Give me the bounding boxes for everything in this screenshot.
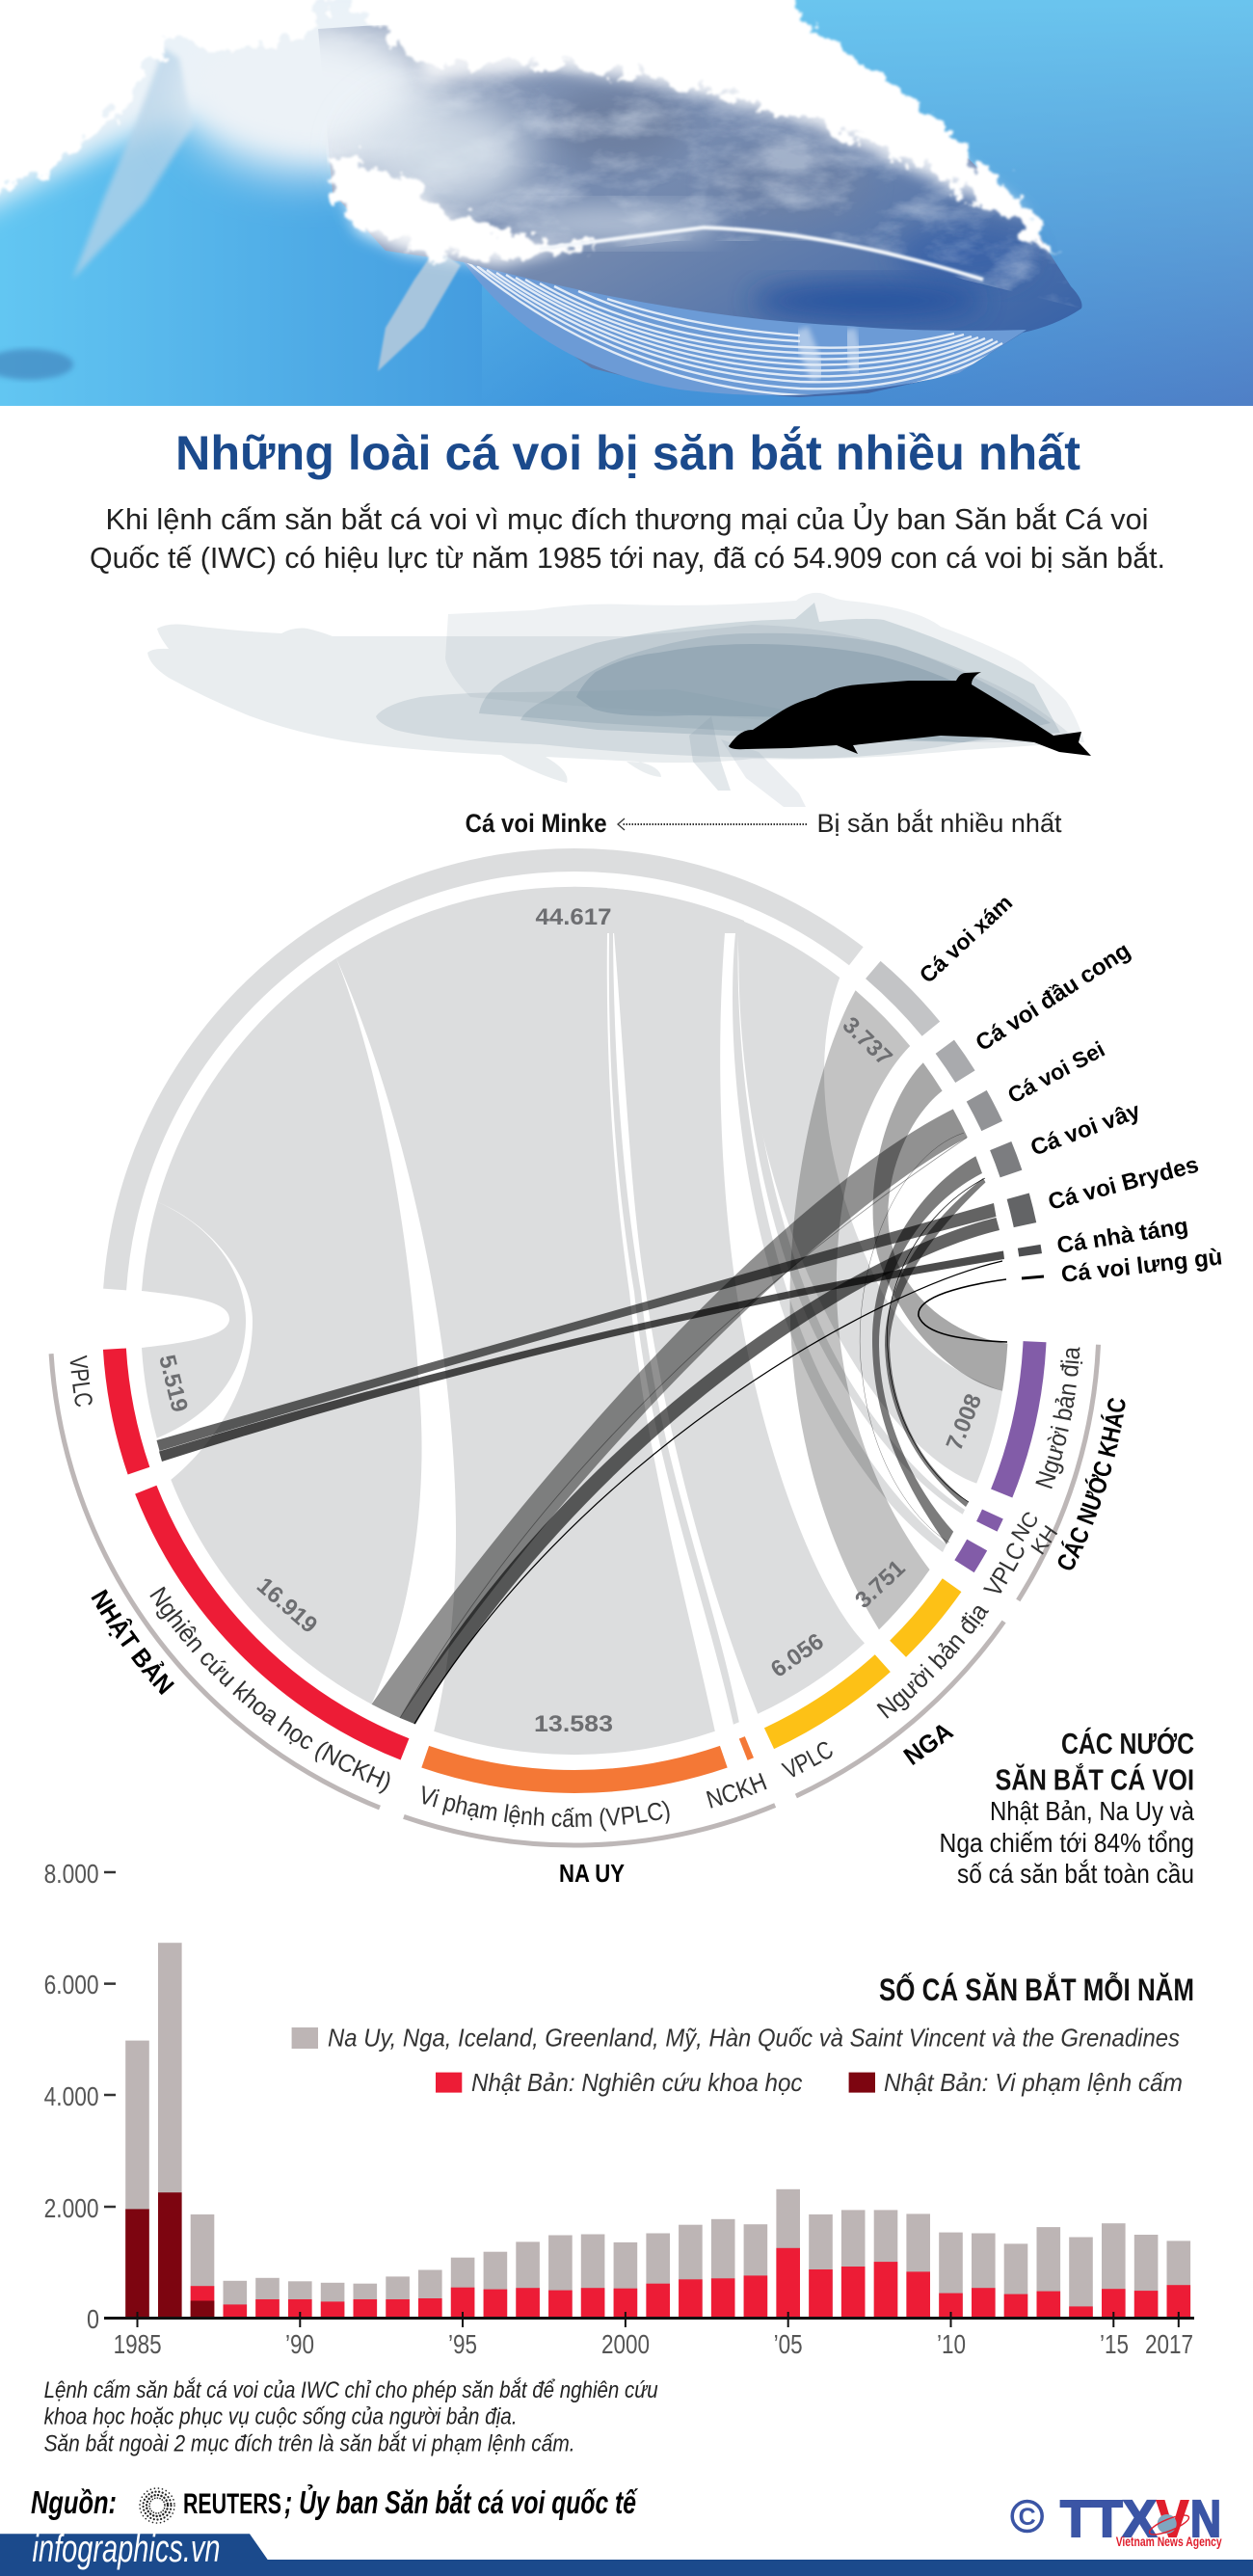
species labels: Cá voi Brydes <box>1046 1152 1201 1216</box>
country labels: NHẬT BẢN <box>91 1589 174 1695</box>
footer band: infographics.vn <box>33 2528 220 2570</box>
y axis: 4.000 <box>44 2081 99 2111</box>
species labels: Cá nhà táng <box>1055 1213 1190 1259</box>
summary text block: Nga chiếm tới 84% tổng <box>939 1828 1194 1858</box>
x axis: ’15 <box>1100 2329 1129 2359</box>
chord values: 7.008 <box>942 1390 987 1454</box>
species labels: Cá voi lưng gù <box>1060 1244 1224 1288</box>
chord values: 44.617 <box>536 904 611 930</box>
chord diagram: Minke ribbons <box>142 887 1002 1755</box>
source line <box>31 2484 639 2523</box>
ring: hunting countries arcs <box>115 1342 1034 1782</box>
bar chart: whales caught per year <box>125 1943 1190 2318</box>
purpose labels on ring: Vi phạm lệnh cấm (VPLC) <box>422 1785 670 1832</box>
purpose labels on ring: Người bản địa <box>1035 1348 1083 1489</box>
summary text block: Nhật Bản, Na Uy và <box>990 1796 1194 1826</box>
species labels <box>915 890 1224 1288</box>
chart legend <box>292 2024 1183 2097</box>
chart legend: Na Uy, Nga, Iceland, Greenland, Mỹ, Hàn Quốc và Saint Vincent và the Grenadines <box>328 2024 1180 2053</box>
purpose labels on ring: VPLC <box>983 1543 1024 1593</box>
country labels: NA UY <box>559 1859 625 1888</box>
minke whale silhouette <box>729 672 1091 756</box>
footnote <box>44 2377 658 2456</box>
footnote: khoa học hoặc phục vụ cuộc sống của người bản địa. <box>44 2404 518 2429</box>
x axis: ’90 <box>285 2329 314 2359</box>
x axis <box>104 2312 1194 2359</box>
x axis: ’05 <box>774 2329 803 2359</box>
TTXVN logo <box>1012 2490 1222 2549</box>
intro text <box>90 501 1165 575</box>
TTXVN logo: V <box>1157 2490 1188 2548</box>
y axis: 2.000 <box>44 2193 99 2223</box>
source line: ; Ủy ban Săn bắt cá voi quốc tế <box>284 2484 639 2520</box>
chord values: 5.519 <box>153 1353 193 1415</box>
chart legend: Nhật Bản: Vi phạm lệnh cấm <box>884 2068 1183 2097</box>
purpose labels on ring: Nghiên cứu khoa học (NCKH) <box>149 1587 389 1794</box>
ring: whale species arcs <box>115 860 1044 1290</box>
chord values: 6.056 <box>766 1628 829 1683</box>
purpose labels on ring: KH <box>1026 1521 1062 1559</box>
chart legend: Nhật Bản: Nghiên cứu khoa học <box>471 2068 802 2097</box>
country labels: NGA <box>898 1716 958 1771</box>
y axis <box>44 1859 116 2334</box>
purpose labels on ring: VPLC <box>69 1355 93 1408</box>
footnote: Lệnh cấm săn bắt cá voi của IWC chỉ cho phép săn bắt để nghiên cứu <box>44 2377 658 2403</box>
intro text: Khi lệnh cấm săn bắt cá voi vì mục đích thương mại của Ủy ban Săn bắt Cá voi <box>106 501 1149 536</box>
footnote: Săn bắt ngoài 2 mục đích trên là săn bắt vi phạm lệnh cấm. <box>44 2431 575 2456</box>
whale size comparison silhouettes <box>147 593 1084 807</box>
species labels: Cá voi đầu cong <box>972 937 1135 1057</box>
summary text block: CÁC NƯỚC <box>1061 1726 1194 1760</box>
y axis: 8.000 <box>44 1859 99 1889</box>
title: Những loài cá voi bị săn bắt nhiều nhất <box>175 426 1080 480</box>
source line: REUTERS <box>183 2488 281 2520</box>
purpose labels on ring: NCKH <box>706 1773 767 1809</box>
country labels: CÁC NƯỚC KHÁC <box>1058 1398 1126 1570</box>
y axis: 6.000 <box>44 1970 99 1999</box>
intro text: Quốc tế (IWC) có hiệu lực từ năm 1985 tới nay, đã có 54.909 con cá voi bị săn bắt. <box>90 541 1165 575</box>
species labels: Cá voi xám <box>915 890 1017 988</box>
chord values: 3.737 <box>838 1012 897 1071</box>
x axis: 2000 <box>601 2329 650 2359</box>
footer band <box>0 2528 1253 2576</box>
purpose labels on ring: Người bản địa <box>877 1606 989 1719</box>
summary text block: SĂN BẮT CÁ VOI <box>995 1762 1194 1797</box>
x axis: 2017 <box>1145 2329 1193 2359</box>
country labels <box>91 1398 1126 1888</box>
TTXVN logo: N <box>1190 2490 1221 2548</box>
summary text block: số cá săn bắt toàn cầu <box>957 1859 1194 1889</box>
y axis: 0 <box>87 2304 99 2334</box>
chord values <box>153 904 987 1737</box>
x axis: 1985 <box>114 2329 162 2359</box>
x axis: ’95 <box>448 2329 477 2359</box>
hero photo: breaching whale <box>0 0 1253 406</box>
most hunted callout: Bị săn bắt nhiều nhất <box>817 808 1062 838</box>
most hunted callout: Cá voi Minke <box>466 809 607 838</box>
TTXVN logo: TTX <box>1060 2490 1157 2548</box>
chord values: 13.583 <box>534 1711 613 1737</box>
species labels: Cá voi Sei <box>1003 1036 1108 1108</box>
chord values: 16.919 <box>252 1572 322 1639</box>
most hunted callout <box>466 808 1062 838</box>
purpose labels on ring: NC <box>1006 1507 1044 1545</box>
summary text block <box>939 1726 1194 1889</box>
outer country brackets <box>51 1345 1099 1845</box>
chord values: 3.751 <box>850 1555 911 1614</box>
purpose labels on ring: VPLC <box>781 1741 833 1778</box>
chord diagram: other species ribbons <box>156 990 1007 1724</box>
x axis: ’10 <box>937 2329 966 2359</box>
source line: Nguồn: <box>31 2484 117 2520</box>
species labels: Cá voi vây <box>1027 1097 1144 1162</box>
TTXVN logo: C <box>1019 2504 1036 2531</box>
purpose labels on ring <box>69 1348 1083 1832</box>
